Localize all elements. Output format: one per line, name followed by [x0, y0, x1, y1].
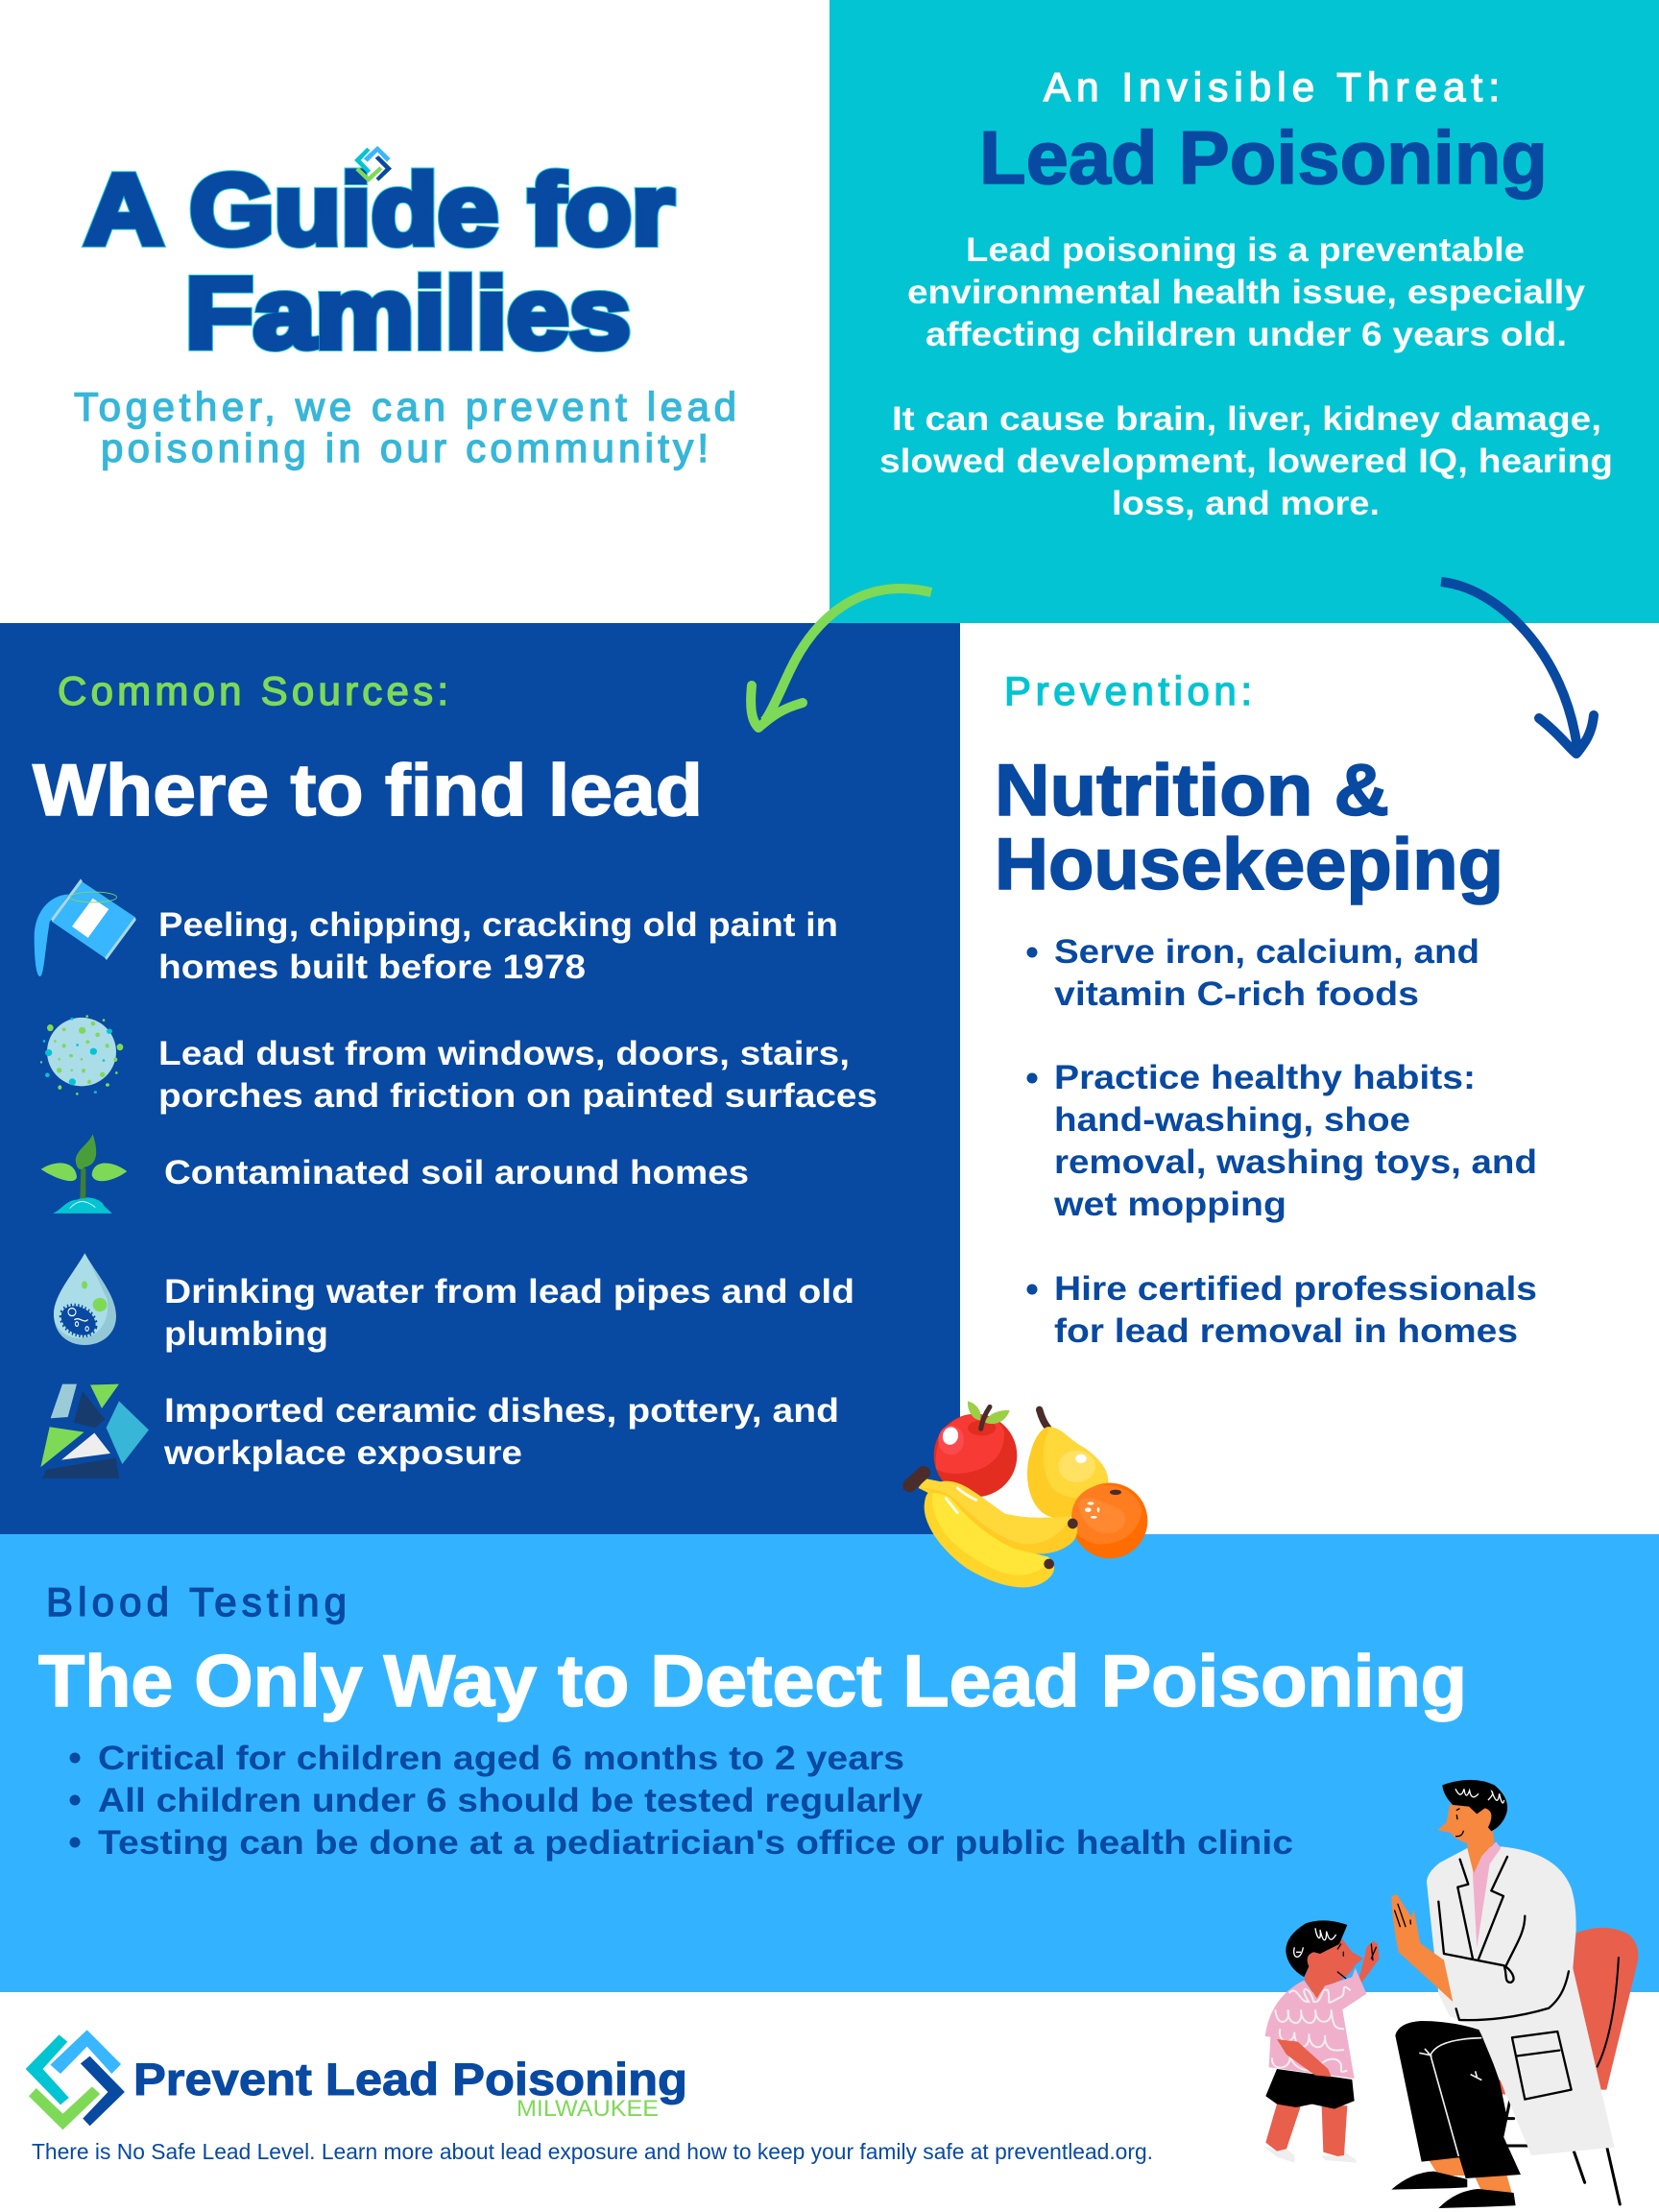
bullet list: prevention tips [1027, 933, 1537, 1350]
text block: lead poisoning description: It can cause brain, liver, kidney damage, [892, 400, 1601, 438]
subheading: an invisible threat: An Invisible Threat: [1044, 64, 1500, 109]
icon: small logo on title [354, 146, 392, 182]
icon: ceramic shards [40, 1384, 149, 1479]
bullet list: prevention tips: for lead removal in homes [1054, 1312, 1518, 1350]
text block: lead sources list: Contaminated soil around homes [164, 1154, 749, 1191]
panel: blood testing [0, 1534, 1659, 1992]
heading: a guide for families: A Guide for [84, 155, 674, 266]
text block: lead poisoning description: Lead poisoning is a preventable [966, 231, 1525, 269]
bullet list: testing facts: Critical for children aged 6 months to 2 years [98, 1740, 904, 1777]
illustration: doctor and child [1262, 1780, 1638, 2208]
illustration: fruit [909, 1401, 1147, 1587]
bullet list: prevention tips: wet mopping [1053, 1186, 1286, 1223]
heading: lead poisoning: Lead Poisoning [979, 115, 1548, 200]
text block: lead poisoning description: affecting children under 6 years old. [926, 316, 1567, 353]
text block: lead poisoning description: loss, and more. [1112, 485, 1380, 522]
text block: lead sources list: Drinking water from lead pipes and old [164, 1273, 854, 1310]
footer: logo and note [26, 2030, 1153, 2164]
heading: a guide for families: Families [185, 258, 631, 370]
heading: nutrition and housekeeping [995, 750, 1503, 905]
bullet list: prevention tips: Serve iron, calcium, and [1054, 933, 1479, 971]
bullet list: prevention tips: Practice healthy habits: [1054, 1059, 1476, 1096]
subheading: blood testing: Blood Testing [46, 1579, 347, 1624]
subheading: common sources: Common Sources: [58, 668, 448, 713]
panel: intro white [0, 0, 830, 623]
text block: lead sources list: plumbing [164, 1315, 328, 1353]
icon: plant seedling [41, 1134, 127, 1214]
bullet list: prevention tips: removal, washing toys, and [1054, 1143, 1537, 1181]
text block: lead poisoning description [879, 231, 1613, 522]
text block: lead sources list: Imported ceramic dishes, pottery, and [164, 1392, 839, 1430]
text block: lead sources list: porches and friction on painted surfaces [158, 1077, 878, 1115]
panel: prevention [995, 668, 1537, 1350]
bullet list: prevention tips: vitamin C-rich foods [1054, 975, 1419, 1013]
heading: a guide for families: A Guide for [84, 155, 674, 266]
subheading: prevention: Prevention: [1004, 668, 1252, 713]
tagline: Together, we can prevent lead [74, 384, 736, 429]
icon: prevent lead poisoning logo [26, 2030, 125, 2129]
tagline: poisoning in our community! [101, 425, 709, 470]
text block: lead poisoning description: environmental health issue, especially [907, 274, 1586, 311]
bullet list: prevention tips: hand-washing, shoe [1054, 1101, 1410, 1139]
panel: common sources [0, 623, 960, 1534]
text block: lead poisoning description: slowed development, lowered IQ, hearing [879, 443, 1613, 480]
text block: lead sources list: homes built before 1978 [158, 949, 586, 986]
text block: lead sources list: workplace exposure [163, 1434, 522, 1472]
text block: lead sources list: Lead dust from windows, doors, stairs, [158, 1035, 850, 1072]
icon: lead dust [40, 1015, 123, 1095]
footer note: There is No Safe Lead Level. Learn more about lead exposure and how to keep your family safe at preventlead.org. [32, 2139, 1153, 2164]
text block: lead sources list [158, 906, 878, 1472]
bullet list: testing facts [69, 1740, 1293, 1862]
heading: nutrition and housekeeping: Nutrition & [995, 750, 1389, 831]
heading: the only way to detect lead poisoning: The Only Way to Detect Lead Poisoning [38, 1641, 1467, 1722]
icon: water drop with microbe [54, 1253, 116, 1345]
heading: nutrition and housekeeping: Housekeeping [995, 824, 1503, 905]
arrow: blue to prevention [1441, 582, 1594, 754]
bullet list: prevention tips: Hire certified professionals [1054, 1270, 1537, 1308]
heading: a guide for families [84, 155, 674, 370]
tagline [74, 384, 736, 470]
logo wordmark: Prevent Lead Poisoning [133, 2054, 687, 2104]
panel: an invisible threat [830, 0, 1659, 623]
logo subtitle: MILWAUKEE [517, 2096, 659, 2122]
bullet list: testing facts: All children under 6 should be tested regularly [98, 1782, 924, 1819]
heading: where to find lead: Where to find lead [33, 750, 703, 831]
heading: a guide for families: Families [185, 258, 631, 370]
bullet list: testing facts: Testing can be done at a pediatrician's office or public health clinic [98, 1824, 1293, 1862]
text block: lead sources list: Peeling, chipping, cracking old paint in [158, 906, 838, 944]
arrow: green to common sources [751, 589, 931, 728]
icon: paint bucket [35, 880, 136, 976]
